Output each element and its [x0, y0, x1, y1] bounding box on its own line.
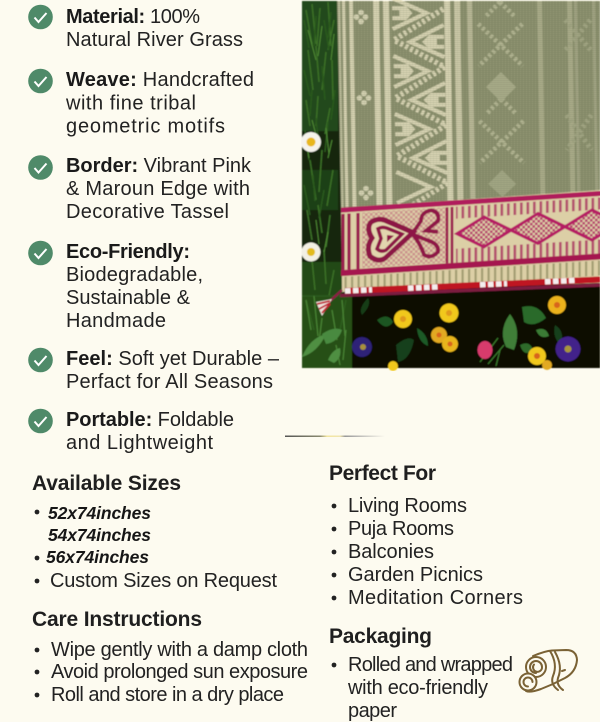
lower stripes [342, 260, 600, 292]
item: border: Decorative Tassel [66, 201, 229, 223]
central motif [478, 2, 592, 197]
section: perfect for: Perfect For [329, 462, 436, 485]
item: feel: Feel: Soft yet Durable – [66, 348, 280, 370]
section: care instructions: Wipe gently with a damp cloth [51, 639, 308, 661]
item: weave [28, 69, 254, 138]
diamond chain [457, 208, 600, 249]
icon: rolled mat [520, 650, 577, 692]
section: perfect for [329, 462, 523, 609]
leaves [302, 298, 562, 366]
section: available sizes: Custom Sizes on Request [50, 570, 277, 592]
flower motifs [354, 10, 373, 200]
section: perfect for: Garden Picnics [348, 564, 483, 586]
item: material [28, 5, 243, 51]
item: feel: Perfact for All Seasons [66, 371, 273, 393]
section: care instructions: Avoid prolonged sun exposure [51, 661, 308, 683]
zigzag column [392, 0, 448, 214]
section: available sizes: 56x74inches [46, 547, 149, 567]
section: available sizes: 52x74inches [48, 503, 151, 523]
section: available sizes: 54x74inches [48, 525, 151, 545]
section: packaging [329, 625, 513, 722]
yellow flowers [388, 296, 566, 371]
item: eco-friendly: Sustainable & [66, 287, 191, 309]
vertical stripes on mat [338, 1, 599, 213]
item: eco-friendly [28, 241, 203, 332]
mat body [337, 1, 600, 216]
section: perfect for: Puja Rooms [348, 518, 454, 540]
flower centres [400, 302, 560, 359]
bobble edge [340, 285, 600, 296]
item: border: Border: Vibrant Pink [66, 155, 252, 177]
item: eco-friendly: Eco-Friendly: [66, 241, 190, 263]
section: care instructions: Care Instructions [32, 608, 202, 631]
item: eco-friendly: Handmade [66, 310, 166, 332]
item: material: Material: 100% [66, 6, 200, 28]
grass strip [302, 1, 346, 330]
checklist [28, 5, 280, 454]
daisies [301, 132, 321, 262]
pink and cream border [341, 190, 600, 292]
divider line [285, 436, 385, 437]
section: available sizes: Available Sizes [32, 472, 181, 495]
item: material: Natural River Grass [66, 29, 243, 51]
section: perfect for: Balconies [348, 541, 434, 563]
item: border [28, 155, 252, 223]
bow motif [413, 210, 438, 258]
section: perfect for: Meditation Corners [348, 587, 523, 609]
item: border: & Maroun Edge with [66, 178, 250, 200]
section: available sizes [32, 472, 277, 592]
item: weave: with fine tribal [65, 92, 196, 114]
item: weave: geometric motifs [66, 116, 225, 138]
photo: woven river grass mat on grass with flowers [301, 0, 600, 371]
section: care instructions: Roll and store in a dry place [51, 684, 284, 706]
tassel [316, 290, 342, 316]
section: packaging: Rolled and wrapped [348, 654, 513, 676]
item: portable: and Lightweight [66, 432, 213, 454]
item: weave: Weave: Handcrafted [66, 69, 254, 91]
section: care instructions [32, 608, 308, 706]
heart motif [368, 217, 413, 261]
item: eco-friendly: Biodegradable, [66, 264, 203, 286]
item: feel [28, 348, 280, 393]
section: packaging: with eco-friendly [347, 677, 488, 699]
left vertical bars [343, 213, 358, 270]
section: packaging: paper [348, 700, 397, 722]
purple flowers and pink bud [352, 336, 580, 362]
section: perfect for: Living Rooms [348, 495, 467, 517]
section: packaging: Packaging [329, 625, 432, 648]
item: portable [28, 409, 234, 454]
item: portable: Portable: Foldable [66, 409, 234, 431]
